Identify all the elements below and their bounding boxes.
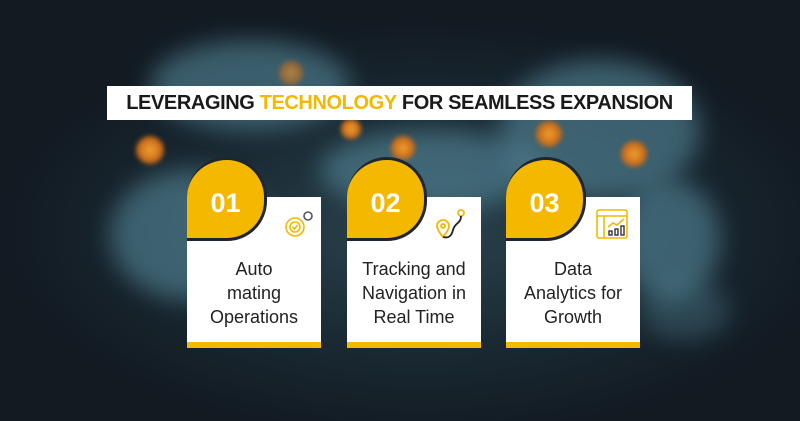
panel: card 3 xyxy=(506,197,640,348)
text: tracking xyxy=(362,259,466,327)
text: automating operations: mating xyxy=(227,283,281,303)
badge: 01: 01 xyxy=(210,188,241,218)
title: TECHNOLOGY xyxy=(260,92,397,114)
text: tracking: Real Time xyxy=(373,307,455,327)
badge: 02: 02 xyxy=(370,188,401,218)
icon: gear xyxy=(285,211,313,237)
text: automating operations: Operations xyxy=(210,307,298,327)
title xyxy=(107,86,692,120)
panel: card 2 xyxy=(347,197,481,348)
text: data analytics: Growth xyxy=(544,307,602,327)
text: data analytics: Data xyxy=(554,259,592,279)
badge: 01 xyxy=(187,157,267,241)
text: data analytics: Analytics for xyxy=(524,283,622,303)
text: automating operations: Auto xyxy=(235,259,273,279)
badge: 03: 03 xyxy=(529,188,560,218)
text: tracking: Navigation in xyxy=(362,283,466,303)
text: data analytics xyxy=(524,259,622,327)
icon: route pin xyxy=(436,209,465,238)
icon: dashboard xyxy=(596,209,628,239)
panel: card 1 xyxy=(187,197,321,348)
badge: 03 xyxy=(506,157,586,241)
text: automating operations xyxy=(210,259,298,327)
badge: 02 xyxy=(347,157,427,241)
text: tracking: Tracking and xyxy=(362,259,466,279)
title: LEVERAGING FOR SEAMLESS EXPANSION xyxy=(126,92,673,114)
